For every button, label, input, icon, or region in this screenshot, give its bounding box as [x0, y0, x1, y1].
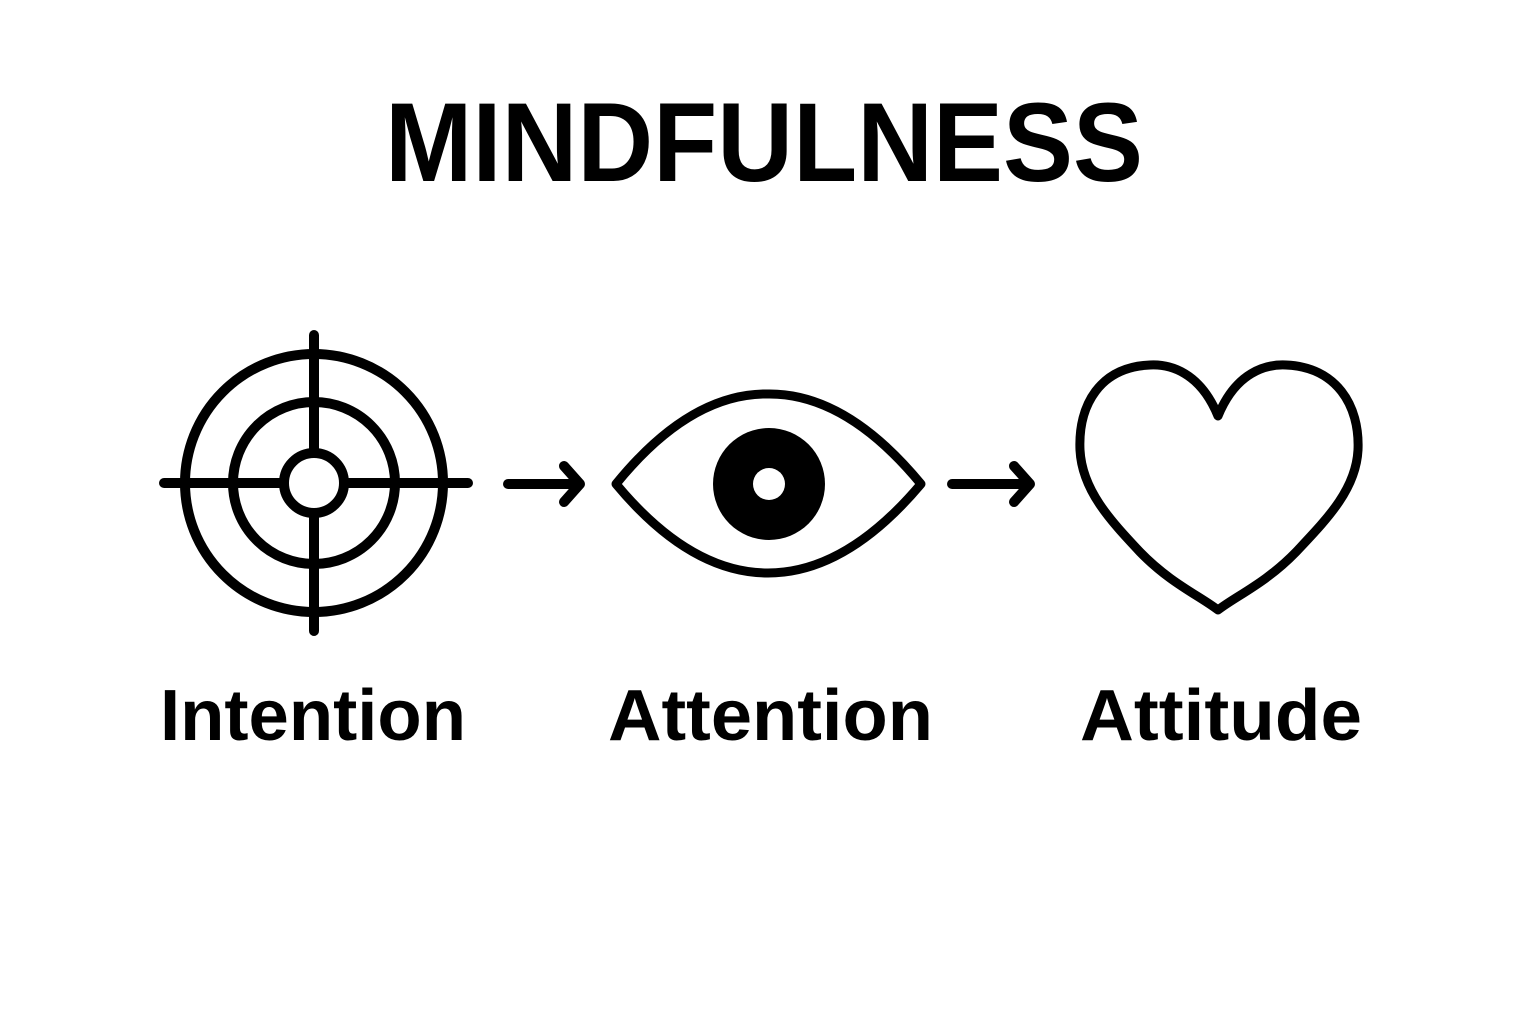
icon: eye: [616, 394, 921, 573]
title: MINDFULNESS: [385, 80, 1143, 205]
label: Intention: Intention: [160, 676, 466, 756]
icon: target: [164, 335, 468, 631]
arrow: attention to attitude: [952, 466, 1030, 502]
arrow: intention to attention: [508, 466, 580, 502]
icon: heart: [1080, 365, 1358, 610]
label: Attitude: Attitude: [1080, 676, 1362, 756]
label: Attention: Attention: [608, 676, 933, 756]
